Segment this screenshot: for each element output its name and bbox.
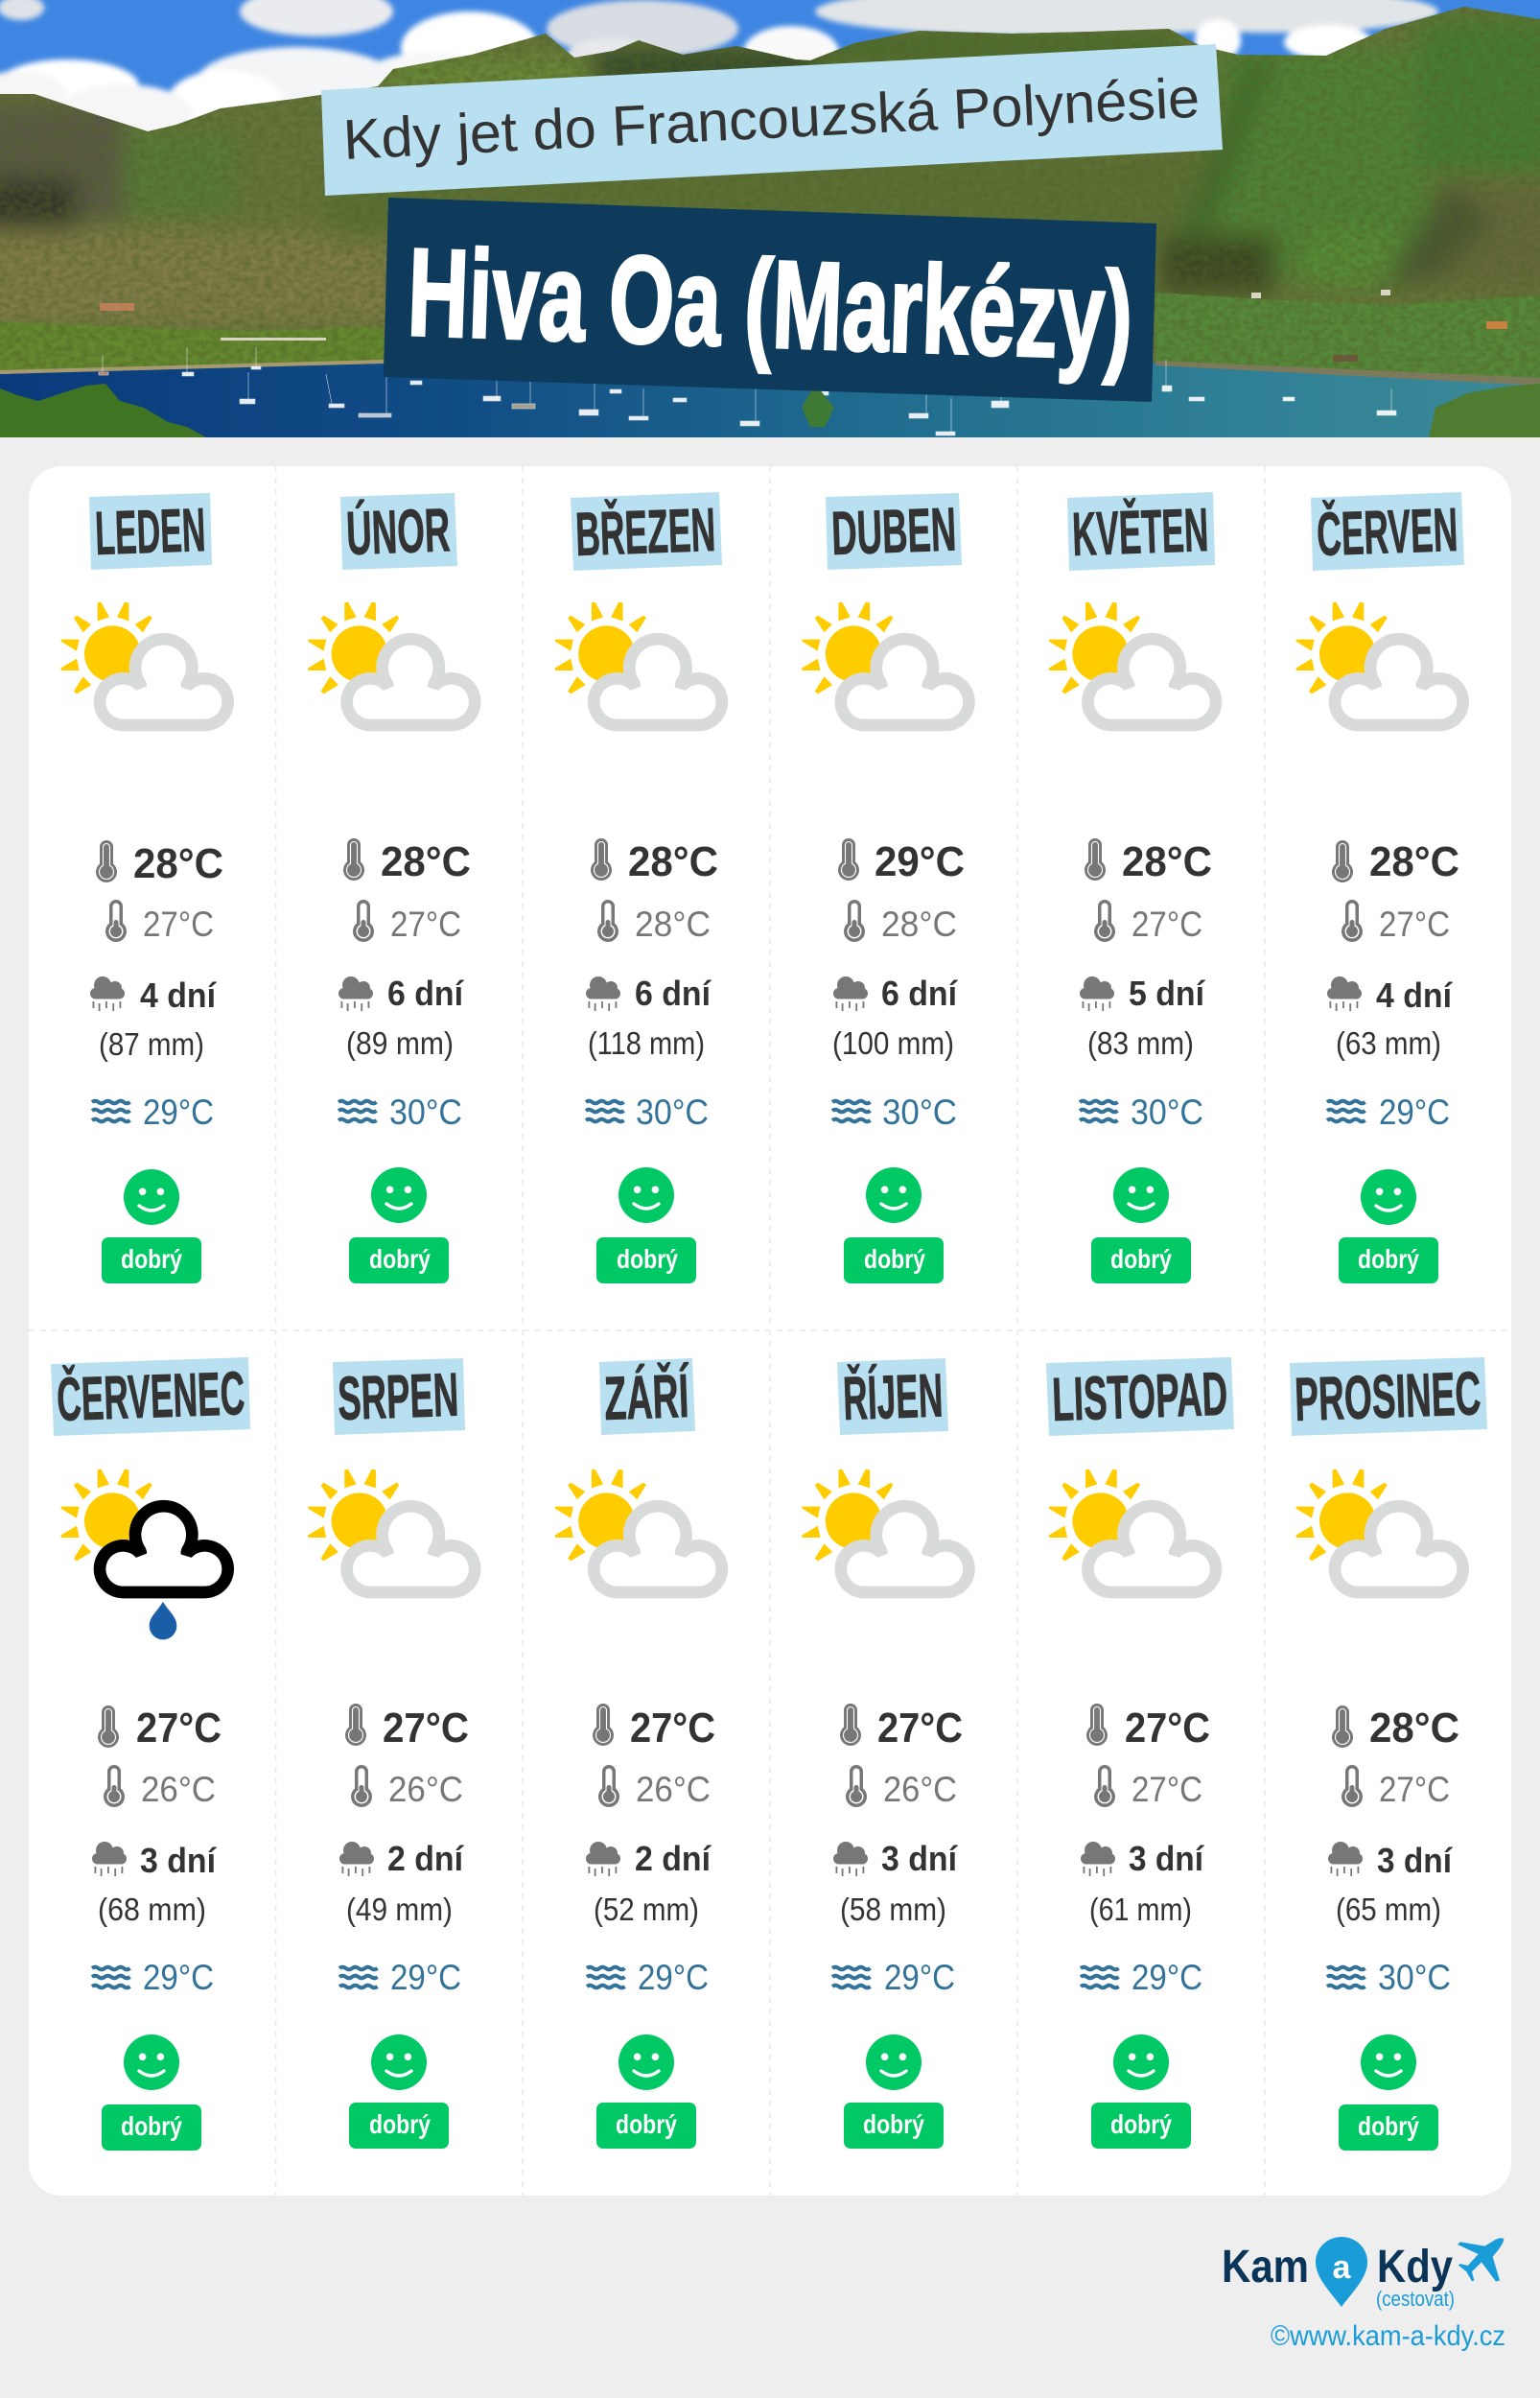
icon: sea — [587, 1967, 625, 1987]
banner: Hiva Oa (Markézy): Hiva Oa (Markézy) — [406, 222, 1135, 386]
icon: sea — [1080, 1101, 1118, 1121]
icon: max temperature — [591, 838, 612, 881]
min temperature: 27°C — [1132, 905, 1202, 944]
icon: smiley — [1113, 2034, 1169, 2090]
icon: sun and cloud — [60, 602, 228, 725]
min temperature: 28°C — [881, 905, 957, 944]
rating badge: dobrý — [1110, 2109, 1172, 2139]
website credit: ©www.kam-a-kdy.cz — [1271, 2320, 1505, 2352]
rating badge: dobrý — [121, 2111, 182, 2141]
icon: sun and cloud — [1049, 602, 1216, 725]
logo wordmark: Kam: Kam — [1222, 2242, 1309, 2292]
rainy days: 3 dní — [1129, 1839, 1204, 1878]
icon: max temperature — [840, 1704, 861, 1746]
header photo: Hiva Oa bay — [0, 0, 1540, 437]
icon: min temperature — [598, 1765, 619, 1807]
month heading — [571, 492, 722, 571]
icon: smiley — [1361, 1169, 1416, 1225]
max temperature: 28°C — [133, 840, 223, 887]
sea temperature: 29°C — [884, 1958, 955, 1997]
icon: sea — [92, 1101, 130, 1121]
min temperature: 27°C — [1379, 1770, 1450, 1809]
icon: max temperature — [1086, 1704, 1108, 1746]
rainfall: (58 mm) — [840, 1892, 946, 1927]
rainy days: 2 dní — [635, 1839, 712, 1878]
icon: min temperature — [1342, 1765, 1363, 1807]
rating badge: dobrý — [617, 1244, 678, 1274]
rainfall: (63 mm) — [1336, 1025, 1441, 1061]
icon: smiley — [866, 2034, 922, 2090]
min temperature: 27°C — [1132, 1770, 1202, 1809]
panel: monthly climate table — [29, 466, 1511, 2196]
month heading: KVĚTEN — [1071, 494, 1209, 569]
min temperature: 26°C — [636, 1770, 711, 1809]
month heading — [89, 493, 212, 570]
panel: listopad — [1046, 1357, 1234, 2149]
logo wordmark: Kdy: Kdy — [1377, 2242, 1453, 2292]
icon: smiley — [866, 1167, 922, 1223]
month heading: LEDEN — [94, 495, 206, 568]
rainy days: 3 dní — [881, 1839, 958, 1878]
rainfall: (68 mm) — [98, 1892, 206, 1927]
month heading — [51, 1357, 250, 1436]
rainy days: 4 dní — [1376, 976, 1453, 1015]
panel: rijen — [802, 1358, 968, 2149]
icon: sea — [339, 1967, 378, 1987]
rating badge: dobrý — [369, 2109, 431, 2139]
sea temperature: 30°C — [1378, 1958, 1451, 1997]
icon: airplane — [1458, 2238, 1504, 2282]
icon: sun and cloud — [802, 1469, 968, 1592]
rating badge — [844, 1237, 944, 1283]
icon: sea — [1081, 1967, 1119, 1987]
icon: rain — [1327, 976, 1362, 1011]
icon: max temperature — [1332, 1705, 1353, 1748]
rainy days: 5 dní — [1129, 974, 1205, 1013]
rainfall: (61 mm) — [1089, 1892, 1192, 1927]
icon: rain — [833, 1842, 868, 1876]
rating badge — [1091, 2103, 1191, 2149]
sea temperature: 30°C — [1131, 1093, 1203, 1132]
min temperature: 28°C — [635, 905, 711, 944]
logo tagline: (cestovat) — [1376, 2287, 1455, 2311]
icon: min temperature — [597, 900, 618, 942]
rating badge — [349, 2103, 449, 2149]
icon: sea — [338, 1101, 377, 1121]
month heading — [333, 1358, 465, 1435]
icon: min temperature — [351, 1765, 372, 1807]
min temperature: 27°C — [1379, 905, 1450, 944]
rainy days: 3 dní — [140, 1841, 217, 1880]
icon: sun and cloud — [1295, 1469, 1463, 1592]
icon: sun and cloud — [308, 1469, 475, 1592]
rainfall: (118 mm) — [588, 1025, 705, 1061]
icon: smiley — [1113, 1167, 1169, 1223]
icon: sea — [586, 1101, 624, 1121]
rainy days: 3 dní — [1377, 1841, 1453, 1880]
icon: rain — [92, 1842, 127, 1876]
max temperature: 27°C — [877, 1704, 963, 1751]
rating badge — [1091, 1237, 1191, 1283]
rating badge: dobrý — [1358, 1244, 1419, 1274]
icon: min temperature — [844, 900, 865, 942]
month heading — [1046, 1357, 1234, 1436]
sea temperature: 29°C — [143, 1093, 214, 1132]
icon: rain — [339, 1842, 374, 1876]
sea temperature: 29°C — [1132, 1958, 1202, 1997]
icon: sea — [92, 1967, 130, 1987]
logo: Kam a Kdy — [1222, 2237, 1504, 2311]
icon: rain — [586, 976, 620, 1011]
rating badge: dobrý — [369, 1244, 431, 1274]
icon: sea — [1327, 1101, 1365, 1121]
rating badge — [844, 2103, 944, 2149]
month heading: SRPEN — [337, 1360, 459, 1433]
icon: max temperature — [98, 1705, 119, 1748]
icon: smiley — [1361, 2034, 1416, 2090]
max temperature: 28°C — [1369, 1704, 1459, 1751]
month heading: DUBEN — [830, 494, 957, 568]
panel: cervenec — [51, 1357, 250, 2151]
icon: sun, rain cloud and drop — [60, 1469, 228, 1639]
max temperature: 28°C — [1369, 838, 1459, 885]
icon: smiley — [371, 2034, 427, 2090]
rating badge — [349, 1237, 449, 1283]
icon: sun and cloud — [1295, 602, 1463, 725]
icon: rain — [90, 976, 125, 1011]
panel: kveten — [1049, 492, 1216, 1283]
month heading — [1067, 492, 1215, 571]
month heading: ÚNOR — [345, 495, 451, 568]
icon: max temperature — [345, 1704, 366, 1746]
month heading: LISTOPAD — [1051, 1359, 1228, 1434]
rainfall: (83 mm) — [1087, 1025, 1194, 1061]
icon: smiley — [124, 2034, 179, 2090]
icon: smiley — [371, 1167, 427, 1223]
rainfall: (87 mm) — [99, 1026, 204, 1062]
max temperature: 28°C — [628, 838, 718, 885]
icon: max temperature — [838, 838, 859, 881]
month heading — [826, 493, 962, 570]
icon: max temperature — [1085, 838, 1106, 881]
icon: rain — [338, 976, 373, 1011]
rating badge — [102, 1237, 201, 1283]
icon: sun and cloud — [555, 602, 722, 725]
rainy days: 6 dní — [387, 974, 464, 1013]
icon: rain — [1328, 1842, 1363, 1876]
rating badge: dobrý — [863, 2109, 924, 2139]
panel: cerven — [1295, 492, 1464, 1283]
icon: min temperature — [104, 1765, 125, 1807]
icon: min temperature — [353, 900, 374, 942]
icon: max temperature — [96, 840, 117, 882]
month heading: ŘÍJEN — [842, 1359, 944, 1433]
sea temperature: 30°C — [882, 1093, 957, 1132]
month heading — [340, 493, 457, 570]
month heading — [599, 1358, 695, 1435]
month heading — [837, 1358, 948, 1435]
month heading — [1311, 492, 1464, 571]
max temperature: 28°C — [381, 838, 471, 885]
month heading: ČERVENEC — [56, 1357, 245, 1434]
rainy days: 2 dní — [387, 1839, 464, 1878]
rating badge: dobrý — [121, 1244, 182, 1274]
icon: rain — [833, 976, 868, 1011]
max temperature: 27°C — [1125, 1704, 1210, 1751]
sea temperature: 29°C — [390, 1958, 461, 1997]
banner: Hiva Oa (Markézy) — [384, 198, 1156, 402]
min temperature: 27°C — [143, 905, 214, 944]
icon: smiley — [618, 2034, 674, 2090]
icon: sea — [832, 1967, 871, 1987]
rainfall: (49 mm) — [346, 1892, 453, 1927]
panel: unor — [308, 493, 475, 1283]
panel: leden — [60, 493, 228, 1283]
max temperature: 27°C — [630, 1704, 715, 1751]
rating badge — [596, 2103, 696, 2149]
rating badge — [1339, 1237, 1438, 1283]
rating badge: dobrý — [1358, 2111, 1419, 2141]
icon: sun and cloud — [555, 1469, 722, 1592]
icon: rain — [1081, 1842, 1115, 1876]
rating badge: dobrý — [616, 2109, 677, 2139]
icon: min temperature — [1094, 1765, 1115, 1807]
rating badge — [1339, 2104, 1438, 2151]
rainy days: 6 dní — [881, 974, 958, 1013]
panel: duben — [802, 493, 968, 1283]
rainfall: (65 mm) — [1336, 1892, 1441, 1927]
sea temperature: 29°C — [1379, 1093, 1450, 1132]
icon: sea — [832, 1101, 871, 1121]
month heading: BŘEZEN — [574, 494, 716, 569]
icon: min temperature — [846, 1765, 867, 1807]
rainfall: (52 mm) — [594, 1892, 699, 1927]
month heading: ZÁŘÍ — [603, 1360, 691, 1433]
icon: map pin: a — [1333, 2249, 1352, 2286]
icon: smiley — [124, 1169, 179, 1225]
max temperature: 29°C — [875, 838, 965, 885]
icon: sun and cloud — [308, 602, 475, 725]
max temperature: 27°C — [136, 1704, 222, 1751]
banner: Kdy jet do Francouzská Polynésie: Kdy jet do Francouzská Polynésie — [341, 66, 1202, 172]
icon: max temperature — [1332, 840, 1353, 882]
rating badge — [596, 1237, 696, 1283]
icon: rain — [1080, 976, 1114, 1011]
sea temperature: 30°C — [389, 1093, 462, 1132]
icon: max temperature — [343, 838, 364, 881]
icon: map pin — [1316, 2237, 1367, 2307]
icon: max temperature — [593, 1704, 614, 1746]
rainy days: 4 dní — [140, 976, 217, 1015]
icon: rain — [586, 1842, 620, 1876]
min temperature: 27°C — [390, 905, 461, 944]
rainfall: (100 mm) — [832, 1025, 954, 1061]
panel: brezen — [555, 492, 722, 1283]
icon: min temperature — [1342, 900, 1363, 942]
banner: Kdy jet do Francouzská Polynésie — [321, 44, 1223, 196]
icon: min temperature — [105, 900, 127, 942]
icon: min temperature — [1094, 900, 1115, 942]
panel: prosinec — [1290, 1357, 1487, 2151]
sea temperature: 30°C — [636, 1093, 709, 1132]
sea temperature: 29°C — [638, 1958, 709, 1997]
rating badge: dobrý — [1110, 1244, 1172, 1274]
icon: sun and cloud — [802, 602, 968, 725]
rainfall: (89 mm) — [346, 1025, 454, 1061]
min temperature: 26°C — [388, 1770, 463, 1809]
icon: smiley — [618, 1167, 674, 1223]
panel: srpen — [308, 1358, 475, 2149]
max temperature: 27°C — [383, 1704, 469, 1751]
icon: sea — [1327, 1967, 1365, 1987]
max temperature: 28°C — [1122, 838, 1212, 885]
min temperature: 26°C — [883, 1770, 957, 1809]
panel: zari — [555, 1358, 722, 2149]
rainy days: 6 dní — [635, 974, 712, 1013]
min temperature: 26°C — [141, 1770, 216, 1809]
icon: sun and cloud — [1049, 1469, 1216, 1592]
rating badge — [102, 2104, 201, 2151]
sea temperature: 29°C — [143, 1958, 214, 1997]
rating badge: dobrý — [864, 1244, 925, 1274]
